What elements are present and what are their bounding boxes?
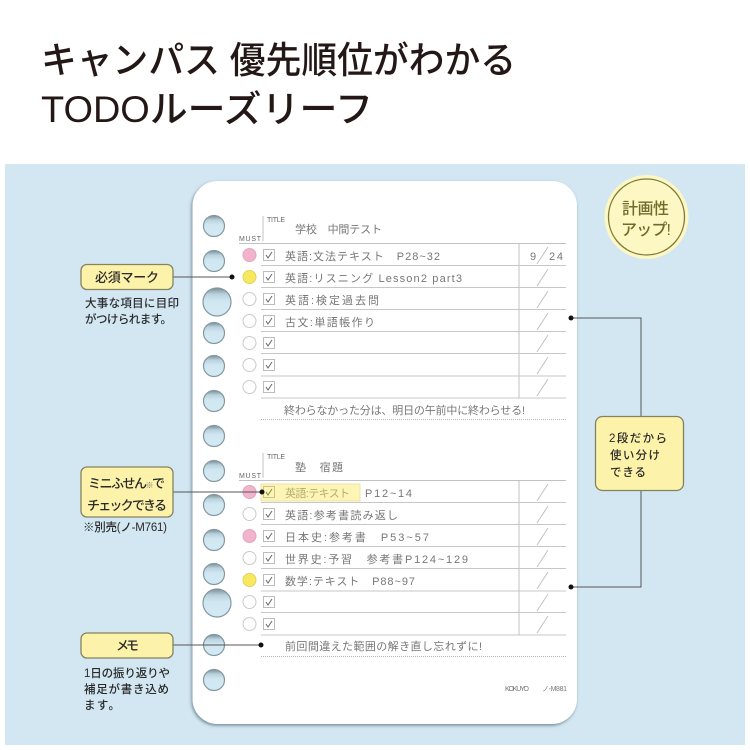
- handwritten tasks lower: 前回間違えた範囲の解き直し忘れずに!: [285, 639, 482, 653]
- callout: mini sticky: チェックできる: [87, 498, 167, 513]
- handwritten tasks upper: 英語:検定過去問: [285, 293, 379, 307]
- panel: upper todo block: [239, 216, 566, 420]
- lower block title: [239, 453, 343, 480]
- handwritten tasks lower: [285, 486, 482, 653]
- title: TODOルーズリーフ: [41, 89, 373, 130]
- lower block rules: [239, 480, 566, 656]
- date column upper: [530, 247, 563, 396]
- lower block title: 塾 宿題: [295, 460, 343, 474]
- callout: two sections: 使い分け: [610, 448, 660, 462]
- handwritten tasks lower: 世界史:予習 参考書P124~129: [285, 552, 468, 566]
- callout: must mark: [81, 264, 173, 290]
- text: must mark description: がつけられます。: [85, 312, 172, 326]
- product code: KOKUYO: [505, 686, 530, 693]
- upper block title: [239, 216, 382, 243]
- binder holes: [203, 216, 231, 690]
- product code: [505, 686, 567, 693]
- upper block title: TITLE: [267, 217, 285, 224]
- handwritten tasks lower: 英語:テキスト: [285, 486, 350, 500]
- upper block title: MUST: [239, 236, 262, 243]
- date column upper: 9: [530, 251, 536, 263]
- handwritten tasks upper: 古文:単語帳作り: [285, 315, 375, 329]
- callout: two sections: 2段だから: [609, 431, 667, 445]
- upper block title: 学校 中間テスト: [295, 222, 382, 236]
- leader line: memo: [173, 642, 264, 648]
- lower block title: MUST: [239, 473, 262, 480]
- handwritten tasks upper: 英語:リスニング Lesson2 part3: [285, 271, 462, 285]
- handwritten tasks lower: 数学:テキスト P88~97: [285, 574, 415, 588]
- date column lower: [537, 484, 548, 633]
- callout: memo: [81, 633, 173, 658]
- panel: background: [5, 164, 745, 745]
- handwritten tasks upper: [284, 249, 525, 417]
- text: memo description: 1日の振り返りや: [84, 666, 170, 680]
- handwritten tasks lower: 英語:参考書読み返し: [285, 508, 398, 522]
- must marks upper: [243, 248, 256, 394]
- callout: two sections: [596, 416, 684, 490]
- text: memo description: [84, 666, 170, 712]
- panel: loose-leaf sheet: [192, 181, 577, 724]
- date column upper: 24: [549, 251, 563, 263]
- title: [41, 40, 516, 130]
- mini sticky note: [261, 484, 360, 501]
- product code: ノ-M881: [542, 686, 567, 693]
- handwritten tasks lower: 日本史:参考書 P53~57: [285, 530, 429, 544]
- text: memo description: 補足が書き込め: [84, 682, 169, 696]
- title: キャンパス 優先順位がわかる: [41, 40, 516, 81]
- text: memo description: ます。: [84, 699, 120, 712]
- upper block rules: [239, 244, 566, 420]
- badge: planning up: [604, 175, 688, 259]
- text: must mark description: [85, 296, 179, 326]
- checkboxes upper: [264, 250, 274, 392]
- handwritten tasks lower: P12~14: [365, 488, 412, 500]
- checkboxes lower: [264, 486, 274, 630]
- callout: mini sticky: [81, 467, 173, 517]
- callout: must mark: 必須マーク: [95, 270, 159, 285]
- badge: planning up: 計画性: [622, 200, 669, 218]
- text: sold separately note: ※別売(ノ-M761): [83, 520, 167, 534]
- leader line: mini sticky: [173, 490, 264, 494]
- handwritten tasks upper: 英語:文法テキスト P28~32: [285, 249, 440, 263]
- bracket: two sections: [568, 316, 641, 590]
- callout: two sections: できる: [610, 466, 646, 479]
- badge: planning up: アップ!: [621, 221, 671, 239]
- lower block title: TITLE: [267, 454, 285, 461]
- handwritten tasks upper: 終わらなかった分は、明日の午前中に終わらせる!: [284, 403, 525, 417]
- panel: lower todo block: [239, 453, 566, 656]
- text: must mark description: 大事な項目に目印: [85, 296, 179, 310]
- leader line: must mark: [173, 274, 234, 280]
- callout: memo: メモ: [116, 638, 139, 653]
- must marks lower: [243, 486, 256, 630]
- callout: mini sticky: ミニふせん※で: [88, 476, 165, 491]
